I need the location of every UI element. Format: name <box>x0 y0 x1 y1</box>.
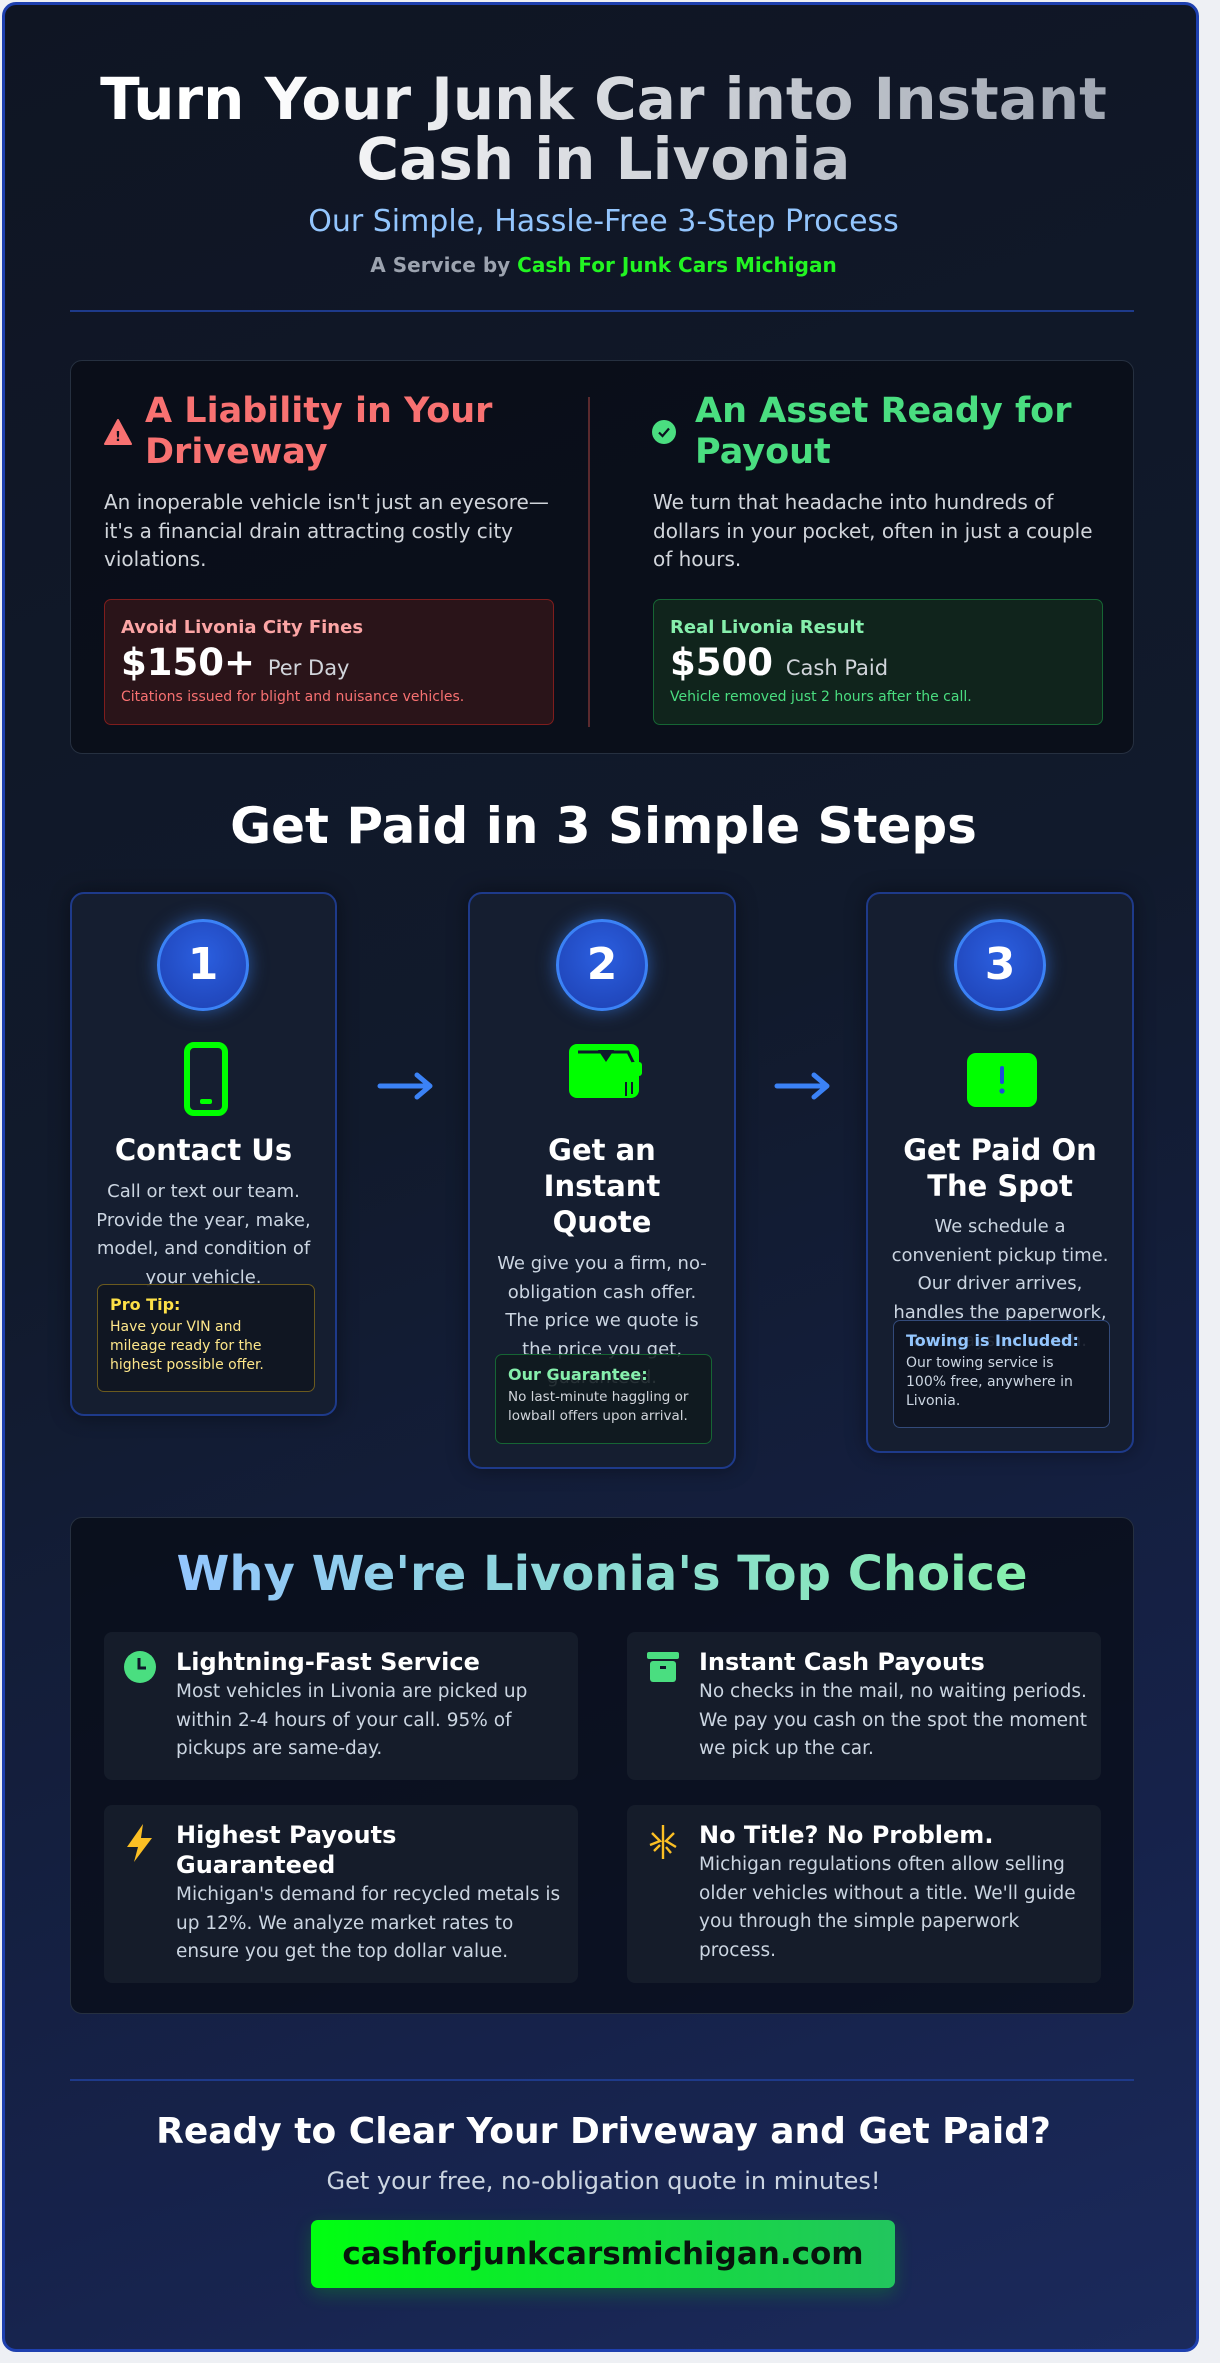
pro tip: Have your VIN and <box>110 1319 241 1335</box>
heading: liability: Driveway <box>145 432 328 472</box>
feature: fast: Lightning-Fast Service <box>176 1648 480 1676</box>
arrow 1 <box>378 1072 432 1100</box>
step title: Contact Us <box>115 1133 292 1167</box>
text: asset: dollars in your pocket, often in just a couple <box>653 518 1093 542</box>
callout: fines: Avoid Livonia City Fines <box>121 617 363 638</box>
feature: cash: we pick up the car. <box>699 1738 874 1759</box>
icon: bolt <box>127 1824 152 1862</box>
step text: your vehicle. <box>145 1266 262 1288</box>
feature: payouts <box>104 1805 578 1983</box>
step text <box>497 1253 707 1388</box>
step text <box>96 1181 311 1288</box>
feature: no title <box>627 1805 1101 1983</box>
step text: and pays you cash. <box>913 1330 1087 1351</box>
cta button: cashforjunkcarsmichigan.com <box>342 2236 864 2272</box>
step text: the price you get, <box>522 1338 682 1360</box>
feature: cash: Instant Cash Payouts <box>699 1648 985 1676</box>
number 2: 2 <box>587 939 617 990</box>
number 1 <box>157 919 249 1011</box>
callout: result: $500 Cash Paid <box>670 641 888 684</box>
step text: We schedule a <box>935 1216 1065 1237</box>
text: liability <box>104 490 549 571</box>
heading: asset: Payout <box>695 432 831 472</box>
pro tip: Pro Tip: <box>110 1295 180 1314</box>
callout: fines: $150+ Per Day <box>121 641 350 684</box>
feature: fast: within 2-4 hours of your call. 95% of <box>176 1710 512 1730</box>
feature: no title: No Title? No Problem. <box>699 1821 993 1849</box>
text: liability: it's a financial drain attracting costly city <box>104 518 513 542</box>
feature: no title: you through the simple paperwork <box>699 1911 1019 1932</box>
arrow 2 <box>774 1072 830 1100</box>
title: Cash in Livonia <box>357 125 850 193</box>
step title: The Spot <box>927 1169 1073 1203</box>
pro tip <box>97 1284 315 1392</box>
feature: cash <box>627 1632 1101 1780</box>
heading: liability: A Liability in Your <box>145 391 492 431</box>
text: liability: violations. <box>104 547 207 571</box>
callout: fines <box>104 599 554 725</box>
cta button <box>311 2220 895 2288</box>
step text: Our driver arrives, <box>918 1273 1082 1294</box>
feature: fast: pickups are same-day. <box>176 1738 382 1759</box>
pro tip: mileage ready for the <box>110 1338 262 1354</box>
step text: Call or text our team. <box>107 1181 300 1202</box>
panel: liability vs asset <box>70 360 1134 754</box>
heading: asset: An Asset Ready for <box>695 391 1072 431</box>
step 2 card <box>468 892 736 1469</box>
number 3: 3 <box>985 939 1015 990</box>
number 1: 1 <box>188 939 218 990</box>
icon: warning: ! <box>115 430 121 445</box>
feature: payouts: ensure you get the top dollar value. <box>176 1941 508 1962</box>
step 1 card <box>70 892 337 1416</box>
step text: The price we quote is <box>505 1310 699 1331</box>
heading: steps: Get Paid in 3 Simple Steps <box>230 797 977 855</box>
guarantee <box>495 1354 712 1444</box>
step title <box>903 1133 1097 1203</box>
text: asset <box>653 490 1093 571</box>
heading: liability <box>145 391 492 472</box>
icon: archive <box>647 1652 679 1682</box>
step text: We give you a firm, no- <box>497 1253 707 1274</box>
step text <box>892 1216 1108 1351</box>
number 2 <box>556 919 648 1011</box>
icon: phone <box>184 1042 228 1116</box>
subtitle: Our Simple, Hassle-Free 3-Step Process <box>308 204 899 239</box>
towing: 100% free, anywhere in <box>906 1374 1073 1390</box>
feature: payouts: Guaranteed <box>176 1851 335 1879</box>
step text: guaranteed. <box>547 1367 657 1388</box>
callout: fines: Citations issued for blight and nuisance vehicles. <box>121 689 464 705</box>
icon: check <box>652 420 676 444</box>
step title: Get Paid On <box>903 1133 1097 1167</box>
step text: Provide the year, make, <box>96 1210 311 1230</box>
towing: Livonia. <box>906 1393 960 1409</box>
feature: no title: process. <box>699 1940 776 1960</box>
pro tip: highest possible offer. <box>110 1357 264 1373</box>
step text: convenient pickup time. <box>892 1244 1108 1266</box>
step 3 card <box>866 892 1134 1453</box>
icon: alert cash <box>967 1053 1037 1107</box>
step title: Instant <box>544 1169 660 1203</box>
callout: result: Vehicle removed just 2 hours after the call. <box>670 689 972 705</box>
title <box>5 69 1202 189</box>
icon: wallet <box>569 1044 642 1098</box>
towing: Towing is Included: <box>906 1331 1079 1350</box>
icon: warning <box>104 419 132 445</box>
text: asset: We turn that headache into hundreds of <box>653 490 1053 514</box>
step text: model, and condition of <box>97 1238 310 1259</box>
step title <box>544 1133 660 1239</box>
heading: why: Why We're Livonia's Top Choice <box>176 1546 1028 1602</box>
towing: Our towing service is <box>906 1355 1054 1371</box>
guarantee: Our Guarantee: <box>508 1365 648 1384</box>
feature: cash: We pay you cash on the spot the moment <box>699 1710 1087 1730</box>
cta subtext: Get your free, no-obligation quote in minutes! <box>326 2167 881 2195</box>
feature: cash: No checks in the mail, no waiting periods. <box>699 1681 1087 1702</box>
cta heading: Ready to Clear Your Driveway and Get Paid? <box>156 2111 1051 2152</box>
feature: payouts: Michigan's demand for recycled metals is <box>176 1884 560 1905</box>
number 3 <box>954 919 1046 1011</box>
callout: result: Real Livonia Result <box>670 617 864 638</box>
byline: A Service by Cash For Junk Cars Michigan <box>370 253 837 277</box>
guarantee: No last-minute haggling or <box>508 1389 688 1405</box>
step text: handles the paperwork, <box>893 1302 1107 1322</box>
title: Turn Your Junk Car into Instant <box>100 65 1107 133</box>
feature: payouts: up 12%. We analyze market rates to <box>176 1912 513 1934</box>
step title: Quote <box>553 1205 651 1239</box>
step text: obligation cash offer. <box>508 1282 696 1302</box>
text: liability: An inoperable vehicle isn't just an eyesore— <box>104 490 549 514</box>
feature: no title: older vehicles without a title. We'll guide <box>699 1882 1076 1904</box>
panel: why us <box>70 1517 1134 2014</box>
icon: spark <box>650 1825 677 1859</box>
feature: payouts: Highest Payouts <box>176 1821 396 1849</box>
text: asset: of hours. <box>653 547 741 571</box>
feature: fast <box>104 1632 578 1780</box>
callout: result <box>653 599 1103 725</box>
step title: Get an <box>548 1133 656 1167</box>
towing <box>893 1320 1110 1428</box>
feature: fast: Most vehicles in Livonia are picked up <box>176 1681 527 1702</box>
guarantee: lowball offers upon arrival. <box>508 1408 688 1424</box>
feature: no title: Michigan regulations often allow selling <box>699 1854 1065 1875</box>
heading: asset <box>695 391 1072 472</box>
icon: clock <box>124 1651 156 1683</box>
